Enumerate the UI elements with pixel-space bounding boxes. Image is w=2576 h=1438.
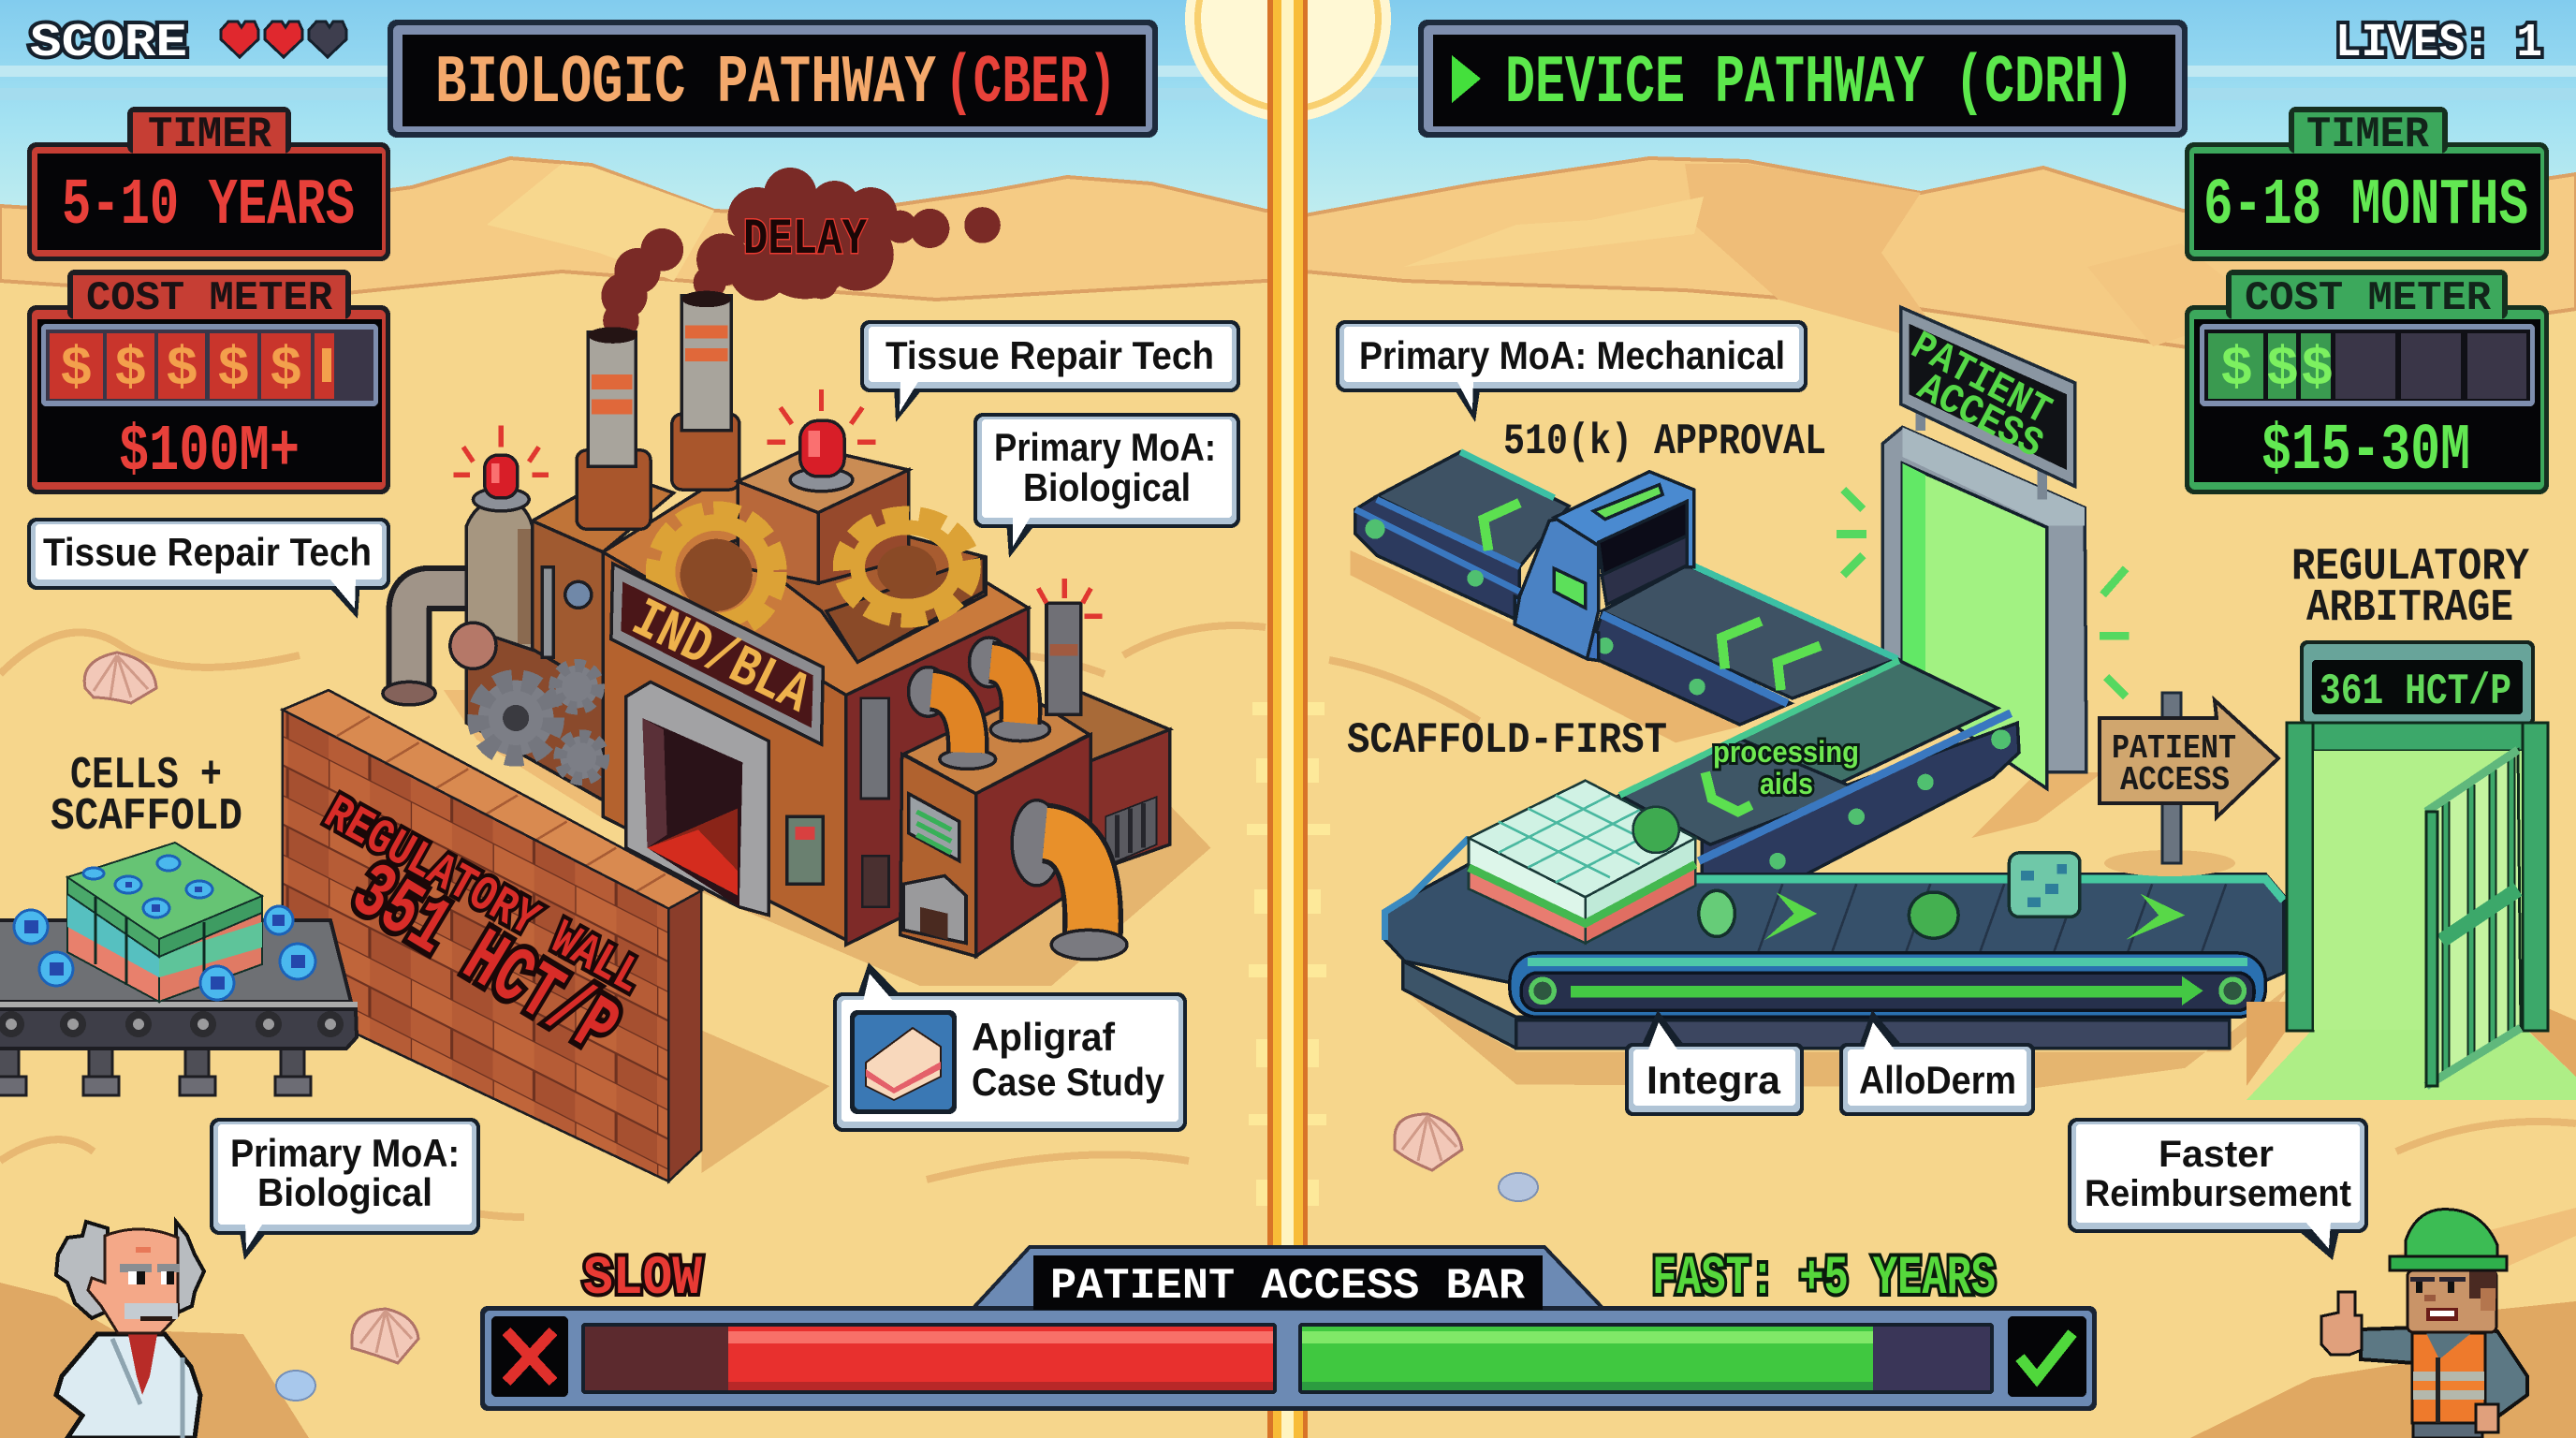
factory side machinery [450, 473, 674, 800]
bar title: PATIENT ACCESS BAR [1050, 1262, 1525, 1311]
bubble: alloderm [1839, 1010, 2035, 1116]
background: sky [0, 0, 2576, 243]
left gray pipe [383, 588, 479, 705]
illustration: regulatory wall [283, 690, 701, 1181]
orange pipes [909, 638, 1127, 960]
title: device pathway [1418, 20, 2188, 138]
title: device pathway: DEVICE PATHWAY (CDRH) [1505, 45, 2134, 122]
label: regulatory arbitrage: REGULATORY [2291, 542, 2529, 593]
wall label: 351 HCT/P: 351 HCT/P [336, 848, 632, 1075]
title: biologic pathway: (CBER) [944, 45, 1117, 122]
sign: patient access gate: PATIENT [1903, 324, 2058, 436]
panel: device timer [2185, 107, 2549, 261]
sign: patient access arrow: ACCESS [2120, 761, 2230, 800]
bubble: tissue repair tech right [860, 320, 1240, 422]
panel: device timer: TIMER [2306, 110, 2429, 159]
bubble: primary MoA mechanical [1336, 320, 1808, 422]
panel: biologic cost meter [27, 270, 390, 494]
green sparks [1837, 490, 2130, 697]
character: scientist [56, 1222, 204, 1438]
panel: 361 HCT/P [2300, 640, 2535, 726]
title: biologic pathway [388, 20, 1158, 138]
bubble: integra [1625, 1010, 1804, 1116]
lower conveyor [1385, 838, 2284, 1049]
panel: biologic cost meter: $ [270, 340, 302, 401]
label: scaffold-first: SCAFFOLD-FIRST [1347, 716, 1667, 765]
panel: biologic timer [27, 107, 390, 261]
panel: biologic timer: 5-10 YEARS [62, 169, 355, 243]
bubble: faster reimbursement [2068, 1118, 2368, 1260]
bubble: tissue repair tech right: Tissue Repair Tech [886, 333, 1214, 377]
smokestack right [672, 291, 739, 490]
label: 510(k) approval: 510(k) APPROVAL [1503, 418, 1826, 466]
sign: IND/BLA: IND/BLA [622, 587, 820, 727]
upper conveyor [1355, 452, 2019, 882]
panel: biologic cost meter: COST METER [86, 275, 333, 322]
callout: apligraf case study: Apligraf [972, 1015, 1116, 1059]
bubble: faster reimbursement: Reimbursement [2085, 1173, 2351, 1214]
bar: fast green track [1298, 1323, 1994, 1394]
label: fast +5 years: FAST: +5 YEARS [1652, 1249, 1996, 1310]
bubble: primary MoA biological lower: Biological [257, 1170, 432, 1214]
alarm light left [453, 426, 549, 511]
panel: biologic cost meter: $ [60, 340, 93, 401]
sign: patient access gate: ACCESS [1910, 364, 2050, 469]
small arch door [903, 875, 966, 943]
callout: apligraf case study [833, 962, 1187, 1132]
title: biologic pathway: BIOLOGIC PATHWAY [435, 45, 937, 122]
callout: apligraf case study: Case Study [972, 1060, 1165, 1104]
smoke plumes [601, 168, 1001, 339]
icon: green check [2008, 1316, 2086, 1397]
sign: patient access arrow [2100, 693, 2278, 876]
panel: device cost meter: $ [2301, 340, 2334, 401]
gray vent [1105, 797, 1157, 866]
label: processing aids: aids [1760, 767, 1813, 800]
gray gears [478, 666, 603, 779]
alarm light right [768, 389, 875, 492]
label: processing aids [1713, 735, 1859, 800]
bubble: primary MoA biological upper: Biological [1023, 465, 1191, 509]
bubble: primary MoA biological upper: Primary MoA: [994, 425, 1216, 469]
smoke label: DELAY: DELAY [743, 212, 867, 269]
panel: 361 HCT/P: 361 HCT/P [2320, 668, 2511, 716]
smokestack left [577, 327, 651, 529]
bar: slow red track [581, 1323, 1277, 1394]
panel: biologic cost meter: $100M+ [119, 416, 300, 490]
bubble: primary MoA biological lower [210, 1118, 480, 1260]
upper cube [738, 447, 909, 583]
panel: biologic timer: TIMER [148, 110, 271, 159]
label: cells + scaffold [51, 751, 242, 843]
panel: device cost meter: $15-30M [2261, 415, 2470, 489]
gateway [1882, 427, 2086, 788]
factory rear block [1035, 687, 1170, 873]
illustration: open green gate [2247, 723, 2576, 1100]
belt chevrons and cell clusters [1699, 853, 2185, 940]
illustration: biologic factory [383, 168, 1211, 1173]
factory side block [900, 695, 1090, 956]
bubble: alloderm: AlloDerm [1859, 1058, 2016, 1102]
icon: hearts [221, 22, 346, 57]
bubble: tissue repair tech left [27, 518, 390, 619]
panel: biologic cost meter: $ [166, 340, 198, 401]
tissue cube [67, 843, 262, 1002]
label: cells + scaffold: SCAFFOLD [51, 792, 242, 843]
green vent screen [909, 794, 959, 861]
center divider [1247, 0, 1330, 1438]
label: slow: SLOW [583, 1249, 702, 1310]
label: cells + scaffold: CELLS + [70, 751, 222, 801]
label: processing aids: processing [1713, 735, 1859, 769]
label: regulatory arbitrage: ARBITRAGE [2306, 583, 2513, 634]
score label: SCORE [30, 17, 187, 70]
golden gears [657, 513, 970, 631]
sign: patient access arrow: PATIENT [2112, 729, 2236, 768]
panel: device cost meter: COST METER [2245, 275, 2492, 322]
illustration: device gate and conveyors [1351, 307, 2291, 1088]
panel: biologic cost meter: $ [217, 340, 250, 401]
bubble: integra: Integra [1647, 1058, 1781, 1102]
green chevrons upper [1484, 503, 1821, 812]
sign: patient access gate [1901, 307, 2075, 500]
panel: device cost meter [2185, 270, 2549, 494]
gate door [2426, 750, 2521, 1086]
scanner arch [1515, 472, 1694, 661]
scaffold block [1469, 781, 1695, 943]
panel: device cost meter: $ [2220, 340, 2253, 401]
icon: pebble right [1499, 1173, 1538, 1201]
bubble: primary MoA biological upper [973, 413, 1240, 558]
chart: patient access bar [480, 1247, 2097, 1411]
icon: skin graft [850, 1010, 957, 1114]
character: construction worker [2321, 1210, 2527, 1438]
icon: shell left [84, 653, 156, 703]
bubble: primary MoA mechanical: Primary MoA: Mechanical [1359, 333, 1785, 377]
small pole with alarm rays [1038, 579, 1103, 714]
sun [1185, 0, 1391, 122]
icon: shell bottom [352, 1309, 418, 1363]
factory door [626, 682, 768, 916]
icon: shell right [1395, 1114, 1462, 1170]
illustration: biologic conveyor with tissue cube [0, 843, 358, 1095]
factory main block [603, 477, 1029, 945]
panel: device cost meter: $ [2266, 340, 2299, 401]
label: regulatory arbitrage [2291, 542, 2529, 634]
wall label: regulatory wall: REGULATORY WALL [315, 785, 651, 1005]
factory control panels [787, 698, 889, 907]
bubble: primary MoA biological lower: Primary MoA: [230, 1131, 460, 1175]
icon: pebble left [276, 1371, 315, 1401]
lives label: LIVES: 1 [2335, 17, 2542, 70]
bubble: faster reimbursement: Faster [2159, 1134, 2274, 1175]
icon: red x [491, 1316, 568, 1397]
bubble: tissue repair tech left: Tissue Repair Tech [43, 530, 372, 574]
silo left [466, 498, 533, 649]
panel: biologic cost meter: $ [114, 340, 147, 401]
